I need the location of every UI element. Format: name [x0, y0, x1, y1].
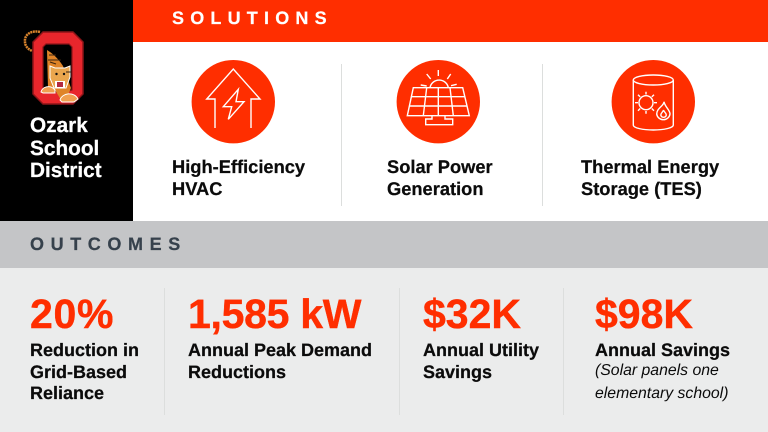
label: Annual Utility [423, 340, 539, 360]
label: Reliance [30, 383, 104, 403]
label [30, 340, 139, 403]
panel: outcomes header [0, 221, 768, 268]
panel: solutions header [133, 0, 768, 42]
label: Thermal Energy [581, 156, 719, 177]
text: district name [30, 114, 102, 182]
label: Storage (TES) [581, 178, 702, 198]
text: district name: School [30, 136, 99, 160]
solution: solar power generation [387, 60, 493, 198]
label [423, 340, 539, 382]
label [595, 340, 730, 402]
label: High-Efficiency [172, 156, 305, 177]
label: Savings [423, 362, 492, 382]
label: Generation [387, 178, 484, 198]
solution: thermal energy storage [581, 60, 720, 199]
icon: house with lightning bolt [192, 60, 275, 144]
metric: 20% [30, 291, 139, 403]
label [172, 156, 306, 198]
text: district name: Ozark [30, 114, 88, 137]
label: (Solar panels one [595, 362, 719, 379]
icon: tiger logo [24, 30, 84, 105]
panel: outcomes metrics [0, 268, 768, 432]
value: $32K [423, 291, 521, 337]
metric: $98K [595, 291, 730, 402]
text: district name: District [30, 159, 102, 182]
solution: high-efficiency HVAC [172, 60, 306, 198]
label [387, 156, 493, 198]
panel: district sidebar [0, 0, 133, 221]
label: Grid-Based [30, 362, 127, 382]
metric: 1,585 kW [188, 291, 372, 382]
label: HVAC [172, 178, 222, 198]
label: Reductions [188, 362, 286, 382]
icon: tank with sun and flame [612, 60, 695, 144]
label: Solar Power [387, 156, 493, 177]
label: elementary school) [595, 384, 728, 402]
metric: $32K [423, 291, 539, 382]
heading: solutions: SOLUTIONS [172, 8, 333, 28]
label: Annual Peak Demand [188, 340, 372, 360]
value: 1,585 kW [188, 291, 361, 337]
heading: outcomes: OUTCOMES [30, 234, 187, 254]
label: Annual Savings [595, 340, 730, 360]
label: Reduction in [30, 340, 139, 360]
label [581, 156, 720, 199]
value: $98K [595, 291, 693, 337]
label [188, 340, 372, 382]
value: 20% [30, 291, 114, 337]
icon: solar panel and sun [396, 60, 480, 144]
